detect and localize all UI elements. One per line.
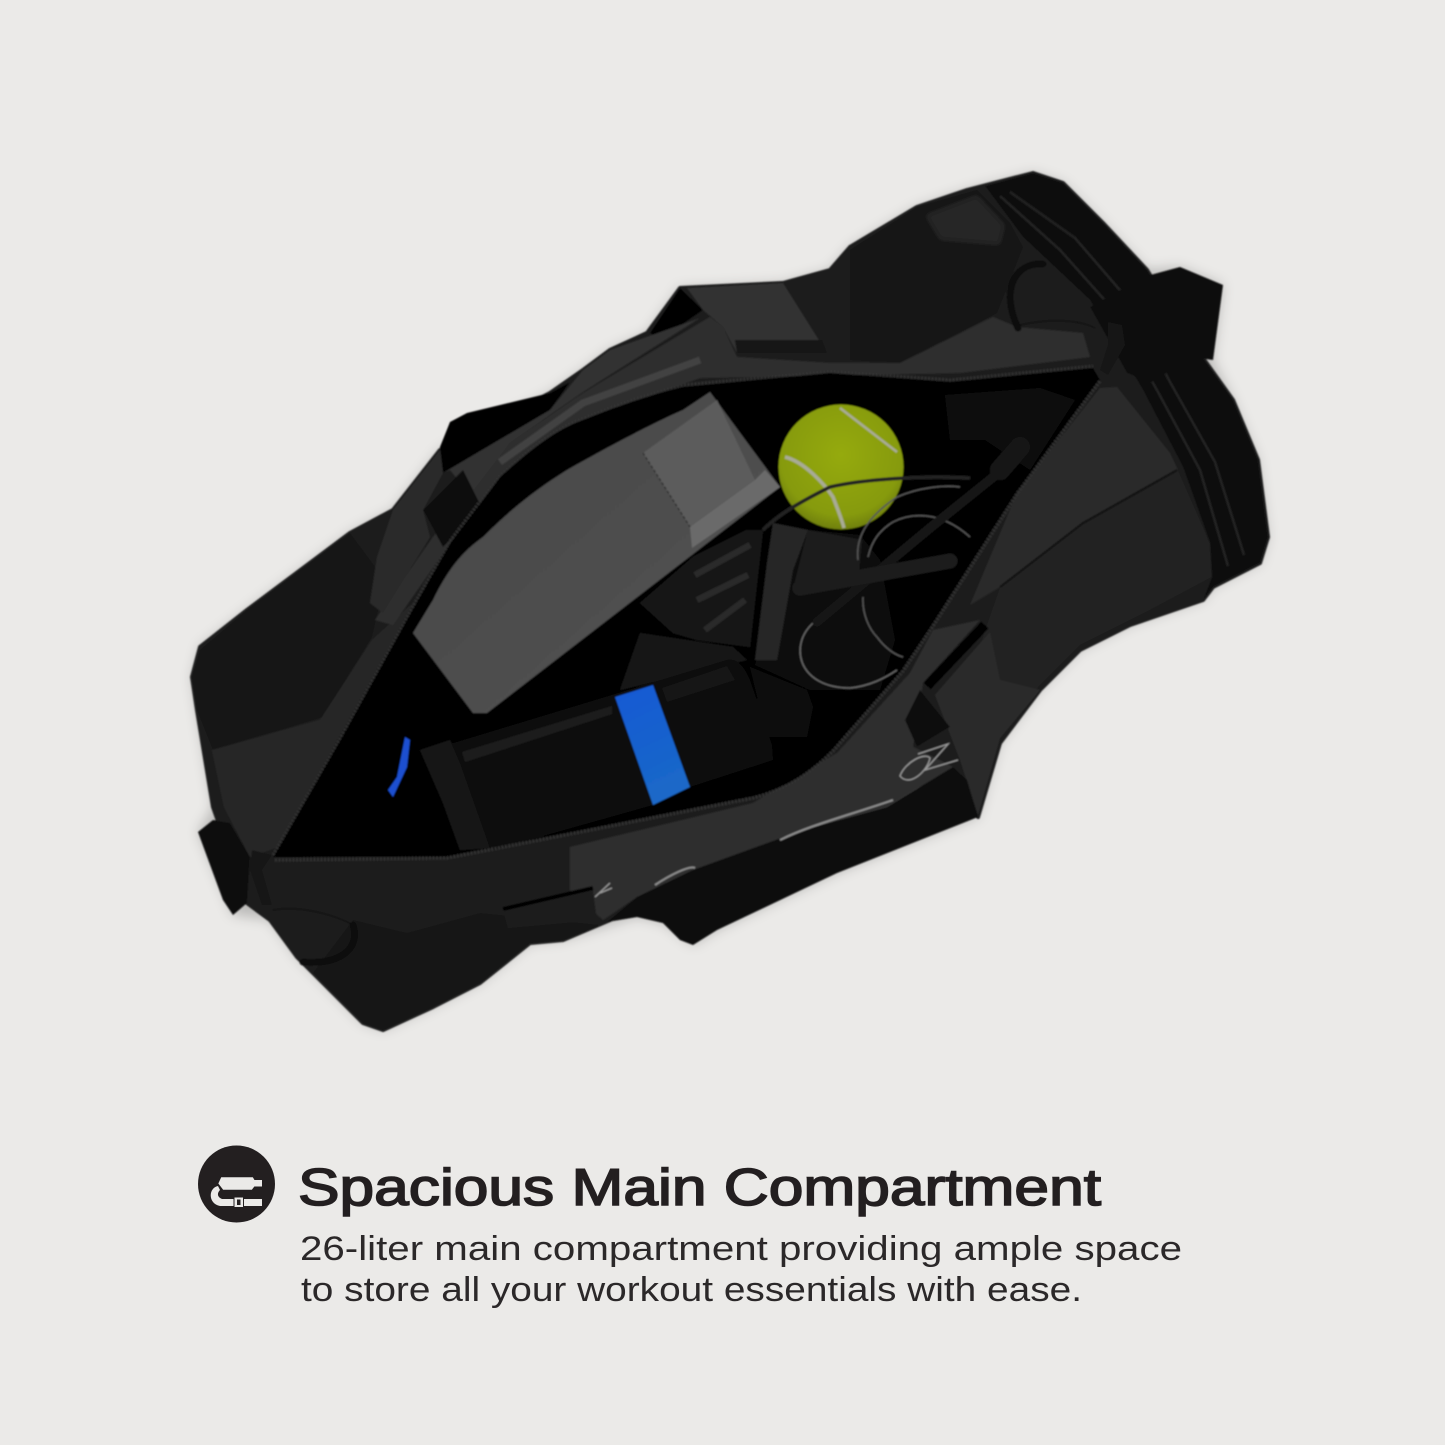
logo scribble left xyxy=(655,867,695,885)
ball seams xyxy=(785,408,897,528)
logo scribble mid xyxy=(780,800,893,840)
tennis ball xyxy=(778,404,904,530)
bottom mesh panel xyxy=(313,913,600,1030)
right side body panel upper xyxy=(970,387,1178,605)
lower front band xyxy=(570,620,980,920)
top handle webbing xyxy=(687,283,827,353)
jump rope xyxy=(763,477,970,688)
zipper pull top right xyxy=(1100,322,1125,375)
lower main zipper xyxy=(275,381,1100,860)
left handle strip xyxy=(370,450,443,613)
end cap ribs xyxy=(1000,192,1244,566)
rope loop outer xyxy=(858,486,960,560)
upper main zipper xyxy=(273,366,1093,855)
side pocket zipper xyxy=(927,625,985,686)
bottle lid xyxy=(420,740,490,850)
lower carry handle xyxy=(607,767,978,945)
handle top strip xyxy=(443,318,700,495)
glove padded palm xyxy=(640,530,763,647)
logo right letters xyxy=(918,744,958,770)
bag drop shadow xyxy=(192,173,1268,1030)
description line 1: 26-liter main compartment providing ample space xyxy=(300,1230,1182,1268)
top handle dark bar xyxy=(735,340,827,353)
towel xyxy=(413,392,780,713)
heading: Spacious Main Compartment xyxy=(298,1159,1102,1217)
bottle flap xyxy=(750,667,813,737)
left grey panel xyxy=(212,603,413,857)
right side body panel lower xyxy=(960,470,1212,735)
rope handle long grip xyxy=(1000,447,1020,470)
bottle body highlight xyxy=(662,666,735,702)
right glove xyxy=(755,530,895,690)
front pocket webbing xyxy=(503,890,597,928)
bottle upper highlight xyxy=(462,706,612,762)
upper right mesh highlight xyxy=(925,195,1005,245)
towel body xyxy=(413,392,780,713)
infographic canvas xyxy=(188,169,1272,1308)
ball fill xyxy=(778,404,904,530)
D-ring top right xyxy=(1010,264,1043,328)
shaker bottle xyxy=(388,660,813,850)
left mesh panel xyxy=(192,533,385,750)
glove mesh xyxy=(620,633,747,690)
bag body xyxy=(192,173,1268,1030)
D-ring bottom left xyxy=(303,925,355,962)
back handle black xyxy=(440,382,570,473)
glove wrist strap xyxy=(755,523,808,660)
bottle body xyxy=(447,660,773,850)
weight gloves xyxy=(620,523,895,690)
glove padding highlights xyxy=(695,545,750,630)
printed logo on bag xyxy=(595,744,958,897)
rope handle short xyxy=(800,561,950,588)
shoulder strap top right xyxy=(1090,267,1223,383)
description text xyxy=(300,1230,1182,1309)
rope loop inner xyxy=(868,516,970,557)
illustration: open duffel bag xyxy=(192,173,1268,1030)
towel fold band xyxy=(690,470,780,548)
rope over ball xyxy=(763,477,970,530)
D-ring cord bottom xyxy=(273,909,353,925)
upper gray band xyxy=(375,317,960,625)
handle inner dark xyxy=(423,470,483,547)
interior dark fabric xyxy=(945,388,1075,470)
description line 2: to store all your workout essentials with ease. xyxy=(301,1271,1082,1309)
side pocket webbing xyxy=(935,632,1040,815)
rope loop bottom xyxy=(800,623,897,688)
blue spout xyxy=(388,737,410,797)
D-ring cord top xyxy=(1020,321,1095,328)
top handle back black xyxy=(650,288,703,340)
main compartment interior xyxy=(273,368,1100,857)
grey panel by zip pull xyxy=(900,317,1090,373)
icon: compartment bag glyph xyxy=(211,1177,262,1208)
rope handle long xyxy=(817,470,1002,622)
logo tick xyxy=(595,883,612,897)
right panel seam xyxy=(1000,470,1177,587)
upper band lighter seam xyxy=(500,360,700,462)
zipper pull bottom left xyxy=(250,850,272,905)
side black handle patch xyxy=(905,690,950,747)
front pocket zipper xyxy=(503,888,593,909)
right end cap xyxy=(985,173,1268,600)
towel tag stitch xyxy=(643,453,690,527)
blue band xyxy=(615,685,690,805)
upper right mesh panel xyxy=(850,190,1023,363)
icon: main compartment badge xyxy=(198,1146,275,1222)
badge circle xyxy=(198,1146,275,1222)
shoulder strap bottom left xyxy=(198,820,250,915)
rope loop lower xyxy=(863,597,903,657)
glove upper right leather xyxy=(793,530,862,590)
towel tag xyxy=(643,400,755,527)
lower left dark band xyxy=(270,832,600,933)
